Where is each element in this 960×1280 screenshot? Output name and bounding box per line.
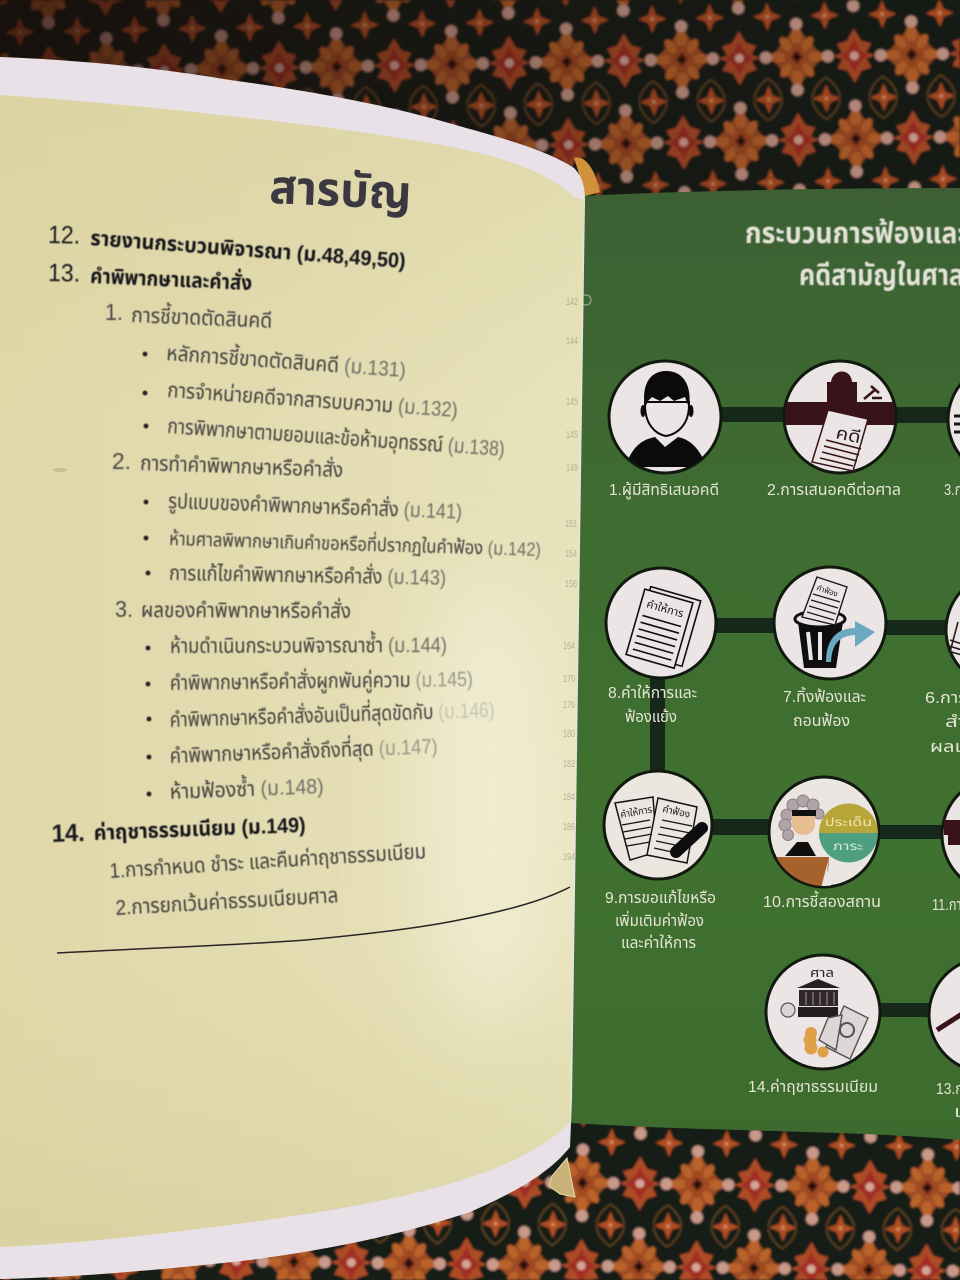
step 9 label xyxy=(605,890,716,952)
step 1: claimant xyxy=(609,361,721,473)
section 13 xyxy=(48,259,253,295)
subsection 2: การทำคำพิพากษาหรือคำสั่ง xyxy=(140,449,344,482)
section 14: ค่าฤชาธรรมเนียม (ม.149) xyxy=(93,814,306,845)
step 6 label xyxy=(925,690,960,756)
subsection 3: 3. xyxy=(115,596,133,622)
banknotes xyxy=(826,1006,868,1059)
step 6: partial icon xyxy=(946,573,960,687)
faint page numbers: 144 xyxy=(566,336,578,347)
subsection 3 items: ห้ามดำเนินกระบวนพิจารณาซ้ำ (ม.144) xyxy=(170,630,447,658)
step 10: two-stage hearing xyxy=(769,777,879,892)
section 12: 12. xyxy=(48,221,80,250)
right page heading xyxy=(745,218,960,292)
faint page numbers: 182 xyxy=(563,759,575,770)
subsection 3 items xyxy=(146,630,495,804)
faint page numbers: 180 xyxy=(563,729,575,740)
step 1 label: 1.ผู้มีสิทธิเสนอคดี xyxy=(609,482,719,499)
faint page numbers: 151 xyxy=(565,519,577,530)
page heading: สารบัญ xyxy=(269,160,413,219)
faint page numbers: 156 xyxy=(565,579,577,590)
ribbon: top bookmark xyxy=(574,157,600,197)
page white edge xyxy=(0,57,585,1279)
faint page numbers: 186 xyxy=(563,822,575,833)
section 12: รายงานกระบวนพิจารณา (ม.48,49,50) xyxy=(90,227,406,273)
step 9 label: 9.การขอแก้ไขหรือ xyxy=(605,890,716,907)
subsection 1 items xyxy=(143,338,506,462)
step 6 label: ผลแ xyxy=(930,739,960,756)
subsection 2 items xyxy=(144,487,541,590)
step 10 label: 10.การชี้สองสถาน xyxy=(763,890,881,911)
return arrow xyxy=(826,621,875,662)
section 13: คำพิพากษาและคำสั่ง xyxy=(90,262,253,295)
step 9: amending plaint and answer xyxy=(604,771,712,879)
step 8: answer and counterclaim: คำให้การ xyxy=(645,598,685,620)
subsection 3 items: ห้ามฟ้องซ้ำ (ม.148) xyxy=(169,771,324,804)
closing rule xyxy=(57,887,570,953)
step 7: withdrawal of plaint: คำฟ้อง xyxy=(815,583,839,599)
step 9 label: เพิ่มเติมค่าฟ้อง xyxy=(615,910,704,930)
panel: right green page xyxy=(570,188,960,1140)
subsection 2 items: การแก้ไขคำพิพากษาหรือคำสั่ง (ม.143) xyxy=(169,559,446,590)
subsection 1 items: หลักการชี้ขาดตัดสินคดี (ม.131) xyxy=(166,338,407,382)
subsection 3 items: คำพิพากษาหรือคำสั่งอันเป็นที่สุดขัดกับ (ม.146) xyxy=(169,695,495,733)
subsection 1: การชี้ขาดตัดสินคดี xyxy=(131,300,273,333)
step 10: two-stage hearing: ประเด็น xyxy=(825,815,872,829)
step 2: filing a case at court xyxy=(784,361,896,473)
faint page numbers: 176 xyxy=(563,700,575,711)
step 8: answer and counterclaim xyxy=(606,568,716,678)
subsection 3: ผลของคำพิพากษาหรือคำสั่ง xyxy=(141,596,351,623)
section 13: 13. xyxy=(48,259,80,288)
step 8 label: 8.คำให้การและ xyxy=(608,685,697,702)
step 14: court fees: ศาล xyxy=(810,966,834,980)
faint page numbers xyxy=(563,297,578,863)
faint page numbers: 145 xyxy=(566,430,578,441)
step 2 label: 2.การเสนอคดีต่อศาล xyxy=(767,481,901,499)
step 13: partial icon xyxy=(929,958,960,1072)
subsection 2 items: รูปแบบของคำพิพากษาหรือคำสั่ง (ม.141) xyxy=(168,487,463,525)
step 9: amending plaint and answer: คำฟ้อง xyxy=(661,803,691,821)
step 3: partial icon xyxy=(948,363,960,477)
step 14 label: 14.ค่าฤชาธรรมเนียม xyxy=(748,1078,878,1096)
step 7 label: ถอนฟ้อง xyxy=(793,712,850,730)
court building xyxy=(797,979,840,988)
page cream surface xyxy=(0,90,590,1255)
section 14 items: 1.การกำหนด ชำระ และคืนค่าฤชาธรรมเนียม xyxy=(109,839,427,883)
subsection 3 items: คำพิพากษาหรือคำสั่งถึงที่สุด (ม.147) xyxy=(169,731,438,769)
subsection 1 items: การจำหน่ายคดีจากสารบบความ (ม.132) xyxy=(167,378,459,422)
faint page numbers: 164 xyxy=(563,641,575,652)
step 9 label: และค่าให้การ xyxy=(621,934,696,952)
subsection 1 xyxy=(105,299,273,333)
step 7 label: 7.ทิ้งฟ้องและ xyxy=(783,686,866,706)
faint page numbers: 145 xyxy=(566,397,578,408)
ribbon: bottom bookmark xyxy=(549,1158,575,1197)
connector lines xyxy=(650,407,955,1017)
contents list xyxy=(48,221,541,920)
panel: left page with contents list xyxy=(0,57,590,1279)
coins xyxy=(804,1027,828,1058)
subsection 2 items: ห้ามศาลพิพากษาเกินคำขอหรือที่ปรากฏในคำฟ้อง (ม.142) xyxy=(169,525,541,561)
faint page numbers: 154 xyxy=(565,549,577,560)
judge xyxy=(779,795,824,840)
hole ring mark xyxy=(581,295,591,305)
step 8 label xyxy=(608,685,697,726)
faint page numbers: 149 xyxy=(566,463,578,474)
faint page numbers: 184 xyxy=(563,792,575,803)
step 8 label: ฟ้องแย้ง xyxy=(625,708,677,726)
step 14: court fees xyxy=(766,955,880,1069)
step 7: withdrawal of plaint xyxy=(774,567,886,679)
faint page numbers: 170 xyxy=(563,674,575,685)
faint page numbers: 142 xyxy=(566,297,578,308)
section 14 items xyxy=(109,839,427,920)
faint page numbers: 194 xyxy=(563,852,575,863)
subsection 1: 1. xyxy=(105,299,123,325)
step 10: two-stage hearing: ภาระ xyxy=(833,841,863,853)
section 14: 14. xyxy=(51,819,85,848)
section 14 items: 2.การยกเว้นค่าธรรมเนียมศาล xyxy=(115,883,339,920)
gavel icon xyxy=(864,386,882,399)
pen xyxy=(676,828,702,852)
step 11: partial icon xyxy=(942,777,960,893)
subsection 2: 2. xyxy=(112,448,131,474)
subsection 1 items: การพิพากษาตามยอมและข้อห้ามอุทธรณ์ (ม.138) xyxy=(167,414,506,462)
step 9: amending plaint and answer: คำให้การ xyxy=(619,804,653,821)
step 2: filing a case at court: คดี xyxy=(834,423,863,447)
subsection 3 items: คำพิพากษาหรือคำสั่งผูกพันคู่ความ (ม.145) xyxy=(170,665,473,696)
step 7 label xyxy=(783,686,866,730)
step 13 label xyxy=(936,1081,960,1121)
